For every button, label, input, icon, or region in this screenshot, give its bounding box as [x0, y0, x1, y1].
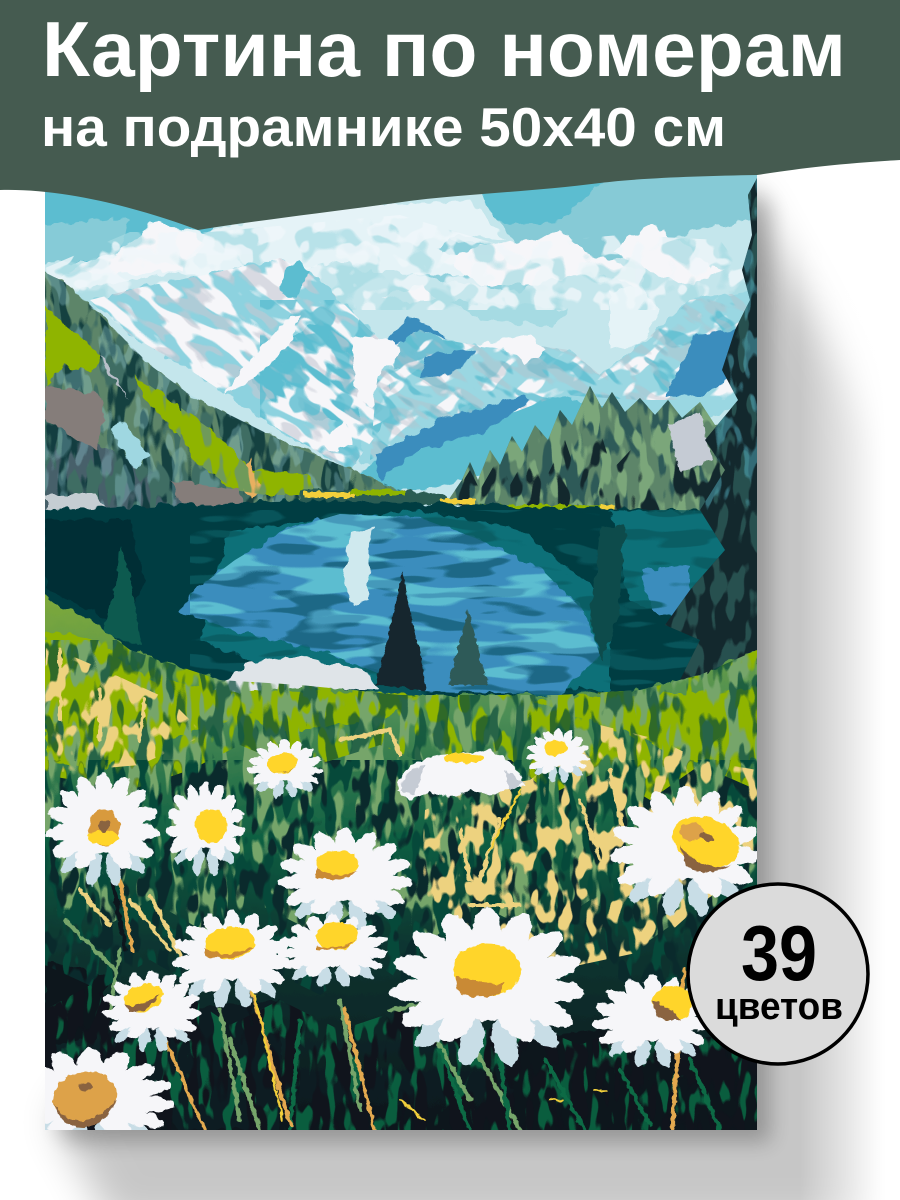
- daisy 1: [45, 772, 161, 887]
- right pine tree: [660, 175, 760, 695]
- meadow texture: [45, 640, 757, 950]
- hillside texture: [40, 270, 420, 515]
- subtitle: на подрамнике 50x40 см: [41, 96, 726, 158]
- daisy 8: [276, 914, 390, 988]
- badge: 39 colours: [688, 884, 868, 1064]
- grass blades and yellow strokes: [60, 650, 720, 1130]
- right forest: [450, 386, 725, 513]
- daisy 10: centre large: [388, 907, 586, 1068]
- lake: [40, 500, 757, 700]
- daisy 3: [247, 739, 323, 799]
- header banner: [0, 0, 900, 230]
- daisy 12: bottom-left: [45, 1046, 175, 1130]
- water ripples: [190, 510, 718, 698]
- daisy 4: dome: [397, 750, 525, 800]
- sky and clouds: [40, 165, 770, 350]
- daisy 5: [526, 729, 590, 783]
- daisy 11: [101, 970, 203, 1052]
- mountain snow texture: [90, 258, 394, 468]
- daisy 6: large right: [608, 786, 762, 918]
- daisies: [45, 728, 757, 1130]
- daisy 13: [591, 975, 713, 1068]
- left wooded hillside: [40, 270, 420, 515]
- badge number: 39: [741, 909, 817, 997]
- small pines in the lake: [102, 545, 488, 690]
- badge label: цветов: [715, 986, 843, 1028]
- daisy 2: [165, 781, 245, 876]
- daisy 7: [276, 828, 414, 931]
- mountains: [90, 258, 757, 490]
- title: Картина по номерам: [42, 5, 846, 93]
- cloud texture: [45, 215, 757, 315]
- daisy 9: [171, 910, 293, 1009]
- blue ridges and snowfields: [225, 262, 740, 480]
- painting: mountain lake with daisies: [45, 175, 757, 1130]
- hillside lit patches: [45, 305, 315, 515]
- meadow: [40, 595, 770, 1135]
